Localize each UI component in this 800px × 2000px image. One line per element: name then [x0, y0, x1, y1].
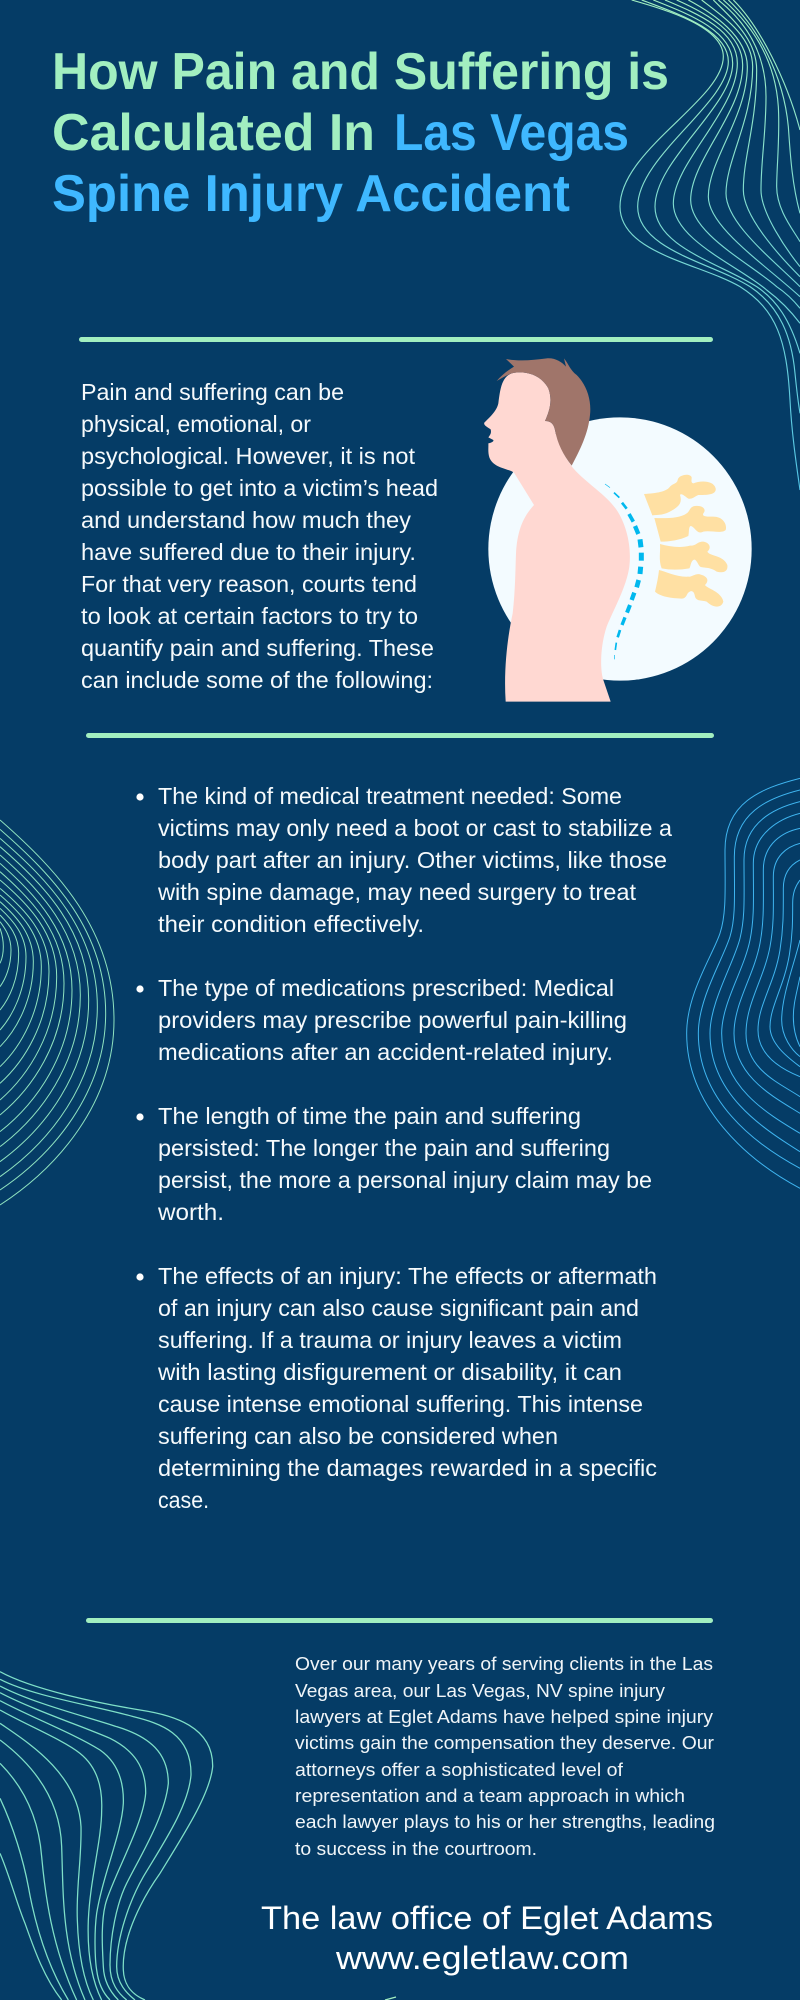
- closing paragraph: lawyers at Eglet Adams have helped spine injury: [295, 1706, 714, 1727]
- bullet: effects of an injury: The effects of an injury: The effects or aftermath: [158, 1263, 657, 1289]
- bullet: medical treatment: body part after an injury. Other victims, like those: [158, 847, 667, 873]
- intro paragraph: [81, 379, 438, 693]
- closing paragraph: Over our many years of serving clients in the Las: [295, 1653, 713, 1674]
- intro paragraph: to look at certain factors to try to: [81, 603, 418, 629]
- bullet: medications: medications after an accident-related injury.: [158, 1039, 613, 1065]
- bullet: medications: [136, 975, 627, 1065]
- illustration: man in profile with spine: [484, 358, 752, 702]
- closing paragraph: attorneys offer a sophisticated level of: [295, 1759, 624, 1780]
- bullet: medical treatment: [136, 783, 672, 937]
- bullet: medical treatment: with spine damage, may need surgery to treat: [157, 879, 637, 905]
- bullet: length of time: worth.: [157, 1199, 224, 1225]
- bullet: medications: The type of medications prescribed: Medical: [158, 975, 614, 1001]
- decoration: bottom-left contour lines: [0, 1672, 213, 2000]
- intro paragraph: physical, emotional, or: [81, 411, 311, 437]
- contact block: [261, 1900, 713, 1976]
- intro paragraph: possible to get into a victim’s head: [81, 475, 438, 501]
- bullet: medical treatment: victims may only need a boot or cast to stabilize a: [158, 815, 672, 841]
- bullet: effects of an injury: suffering can also be considered when: [158, 1423, 558, 1449]
- bullet: effects of an injury: with lasting disfigurement or disability, it can: [157, 1359, 622, 1385]
- title: How Pain and Suffering is: [52, 43, 669, 101]
- divider: bottom: [86, 1618, 713, 1623]
- bullet: length of time: persist, the more a personal injury claim may be: [158, 1167, 652, 1193]
- divider: top: [79, 337, 713, 342]
- intro paragraph: can include some of the following:: [81, 667, 433, 693]
- bullet: medications: providers may prescribe powerful pain-killing: [158, 1007, 627, 1033]
- closing paragraph: to success in the courtroom.: [295, 1838, 537, 1859]
- intro paragraph: Pain and suffering can be: [81, 379, 344, 405]
- closing paragraph: [295, 1653, 715, 1859]
- intro paragraph: psychological. However, it is not: [81, 443, 416, 469]
- title: [52, 43, 669, 223]
- intro paragraph: quantify pain and suffering. These: [81, 635, 434, 661]
- vertebrae: [644, 475, 727, 607]
- closing paragraph: representation and a team approach in which: [295, 1785, 685, 1806]
- intro paragraph: have suffered due to their injury.: [81, 539, 416, 565]
- dashed spine line: [605, 484, 641, 659]
- bullet: length of time: persisted: The longer the pain and suffering: [158, 1135, 610, 1161]
- bullet: length of time: The length of time the pain and suffering: [158, 1103, 581, 1129]
- decoration: bottom edge tick: [385, 1997, 396, 2000]
- contact block: www.egletlaw.com: [335, 1940, 629, 1976]
- closing paragraph: victims gain the compensation they deserve. Our: [295, 1732, 714, 1753]
- background circle: [488, 417, 752, 681]
- bullet list: [136, 783, 672, 1513]
- decoration: right contour lines: [687, 778, 800, 1188]
- bullet: effects of an injury: cause intense emotional suffering. This intense: [158, 1391, 643, 1417]
- body and face: [484, 372, 630, 702]
- closing paragraph: each lawyer plays to his or her strengths, leading: [295, 1811, 715, 1832]
- bullet: effects of an injury: suffering. If a trauma or injury leaves a victim: [158, 1327, 622, 1353]
- title: Calculated In: [52, 104, 375, 162]
- intro paragraph: For that very reason, courts tend: [81, 571, 417, 597]
- decoration: left contour lines: [0, 820, 114, 1205]
- contact block: The law office of Eglet Adams: [261, 1900, 713, 1936]
- decoration: top-right contour lines: [620, 0, 800, 490]
- bullet: effects of an injury: of an injury can also cause significant pain and: [158, 1295, 639, 1321]
- title: Spine Injury Accident: [52, 165, 570, 223]
- divider: middle: [86, 733, 714, 738]
- bullet: effects of an injury: case.: [158, 1487, 209, 1513]
- title: Las Vegas: [394, 104, 629, 162]
- closing paragraph: Vegas area, our Las Vegas, NV spine injury: [295, 1680, 666, 1701]
- bullet: effects of an injury: determining the damages rewarded in a specific: [158, 1455, 657, 1481]
- bullet: medical treatment: their condition effectively.: [158, 911, 424, 937]
- intro paragraph: and understand how much they: [81, 507, 412, 533]
- bullet: length of time: [136, 1103, 652, 1225]
- hair: [497, 358, 590, 466]
- bullet: effects of an injury: [136, 1263, 657, 1513]
- bullet: medical treatment: The kind of medical treatment needed: Some: [158, 783, 622, 809]
